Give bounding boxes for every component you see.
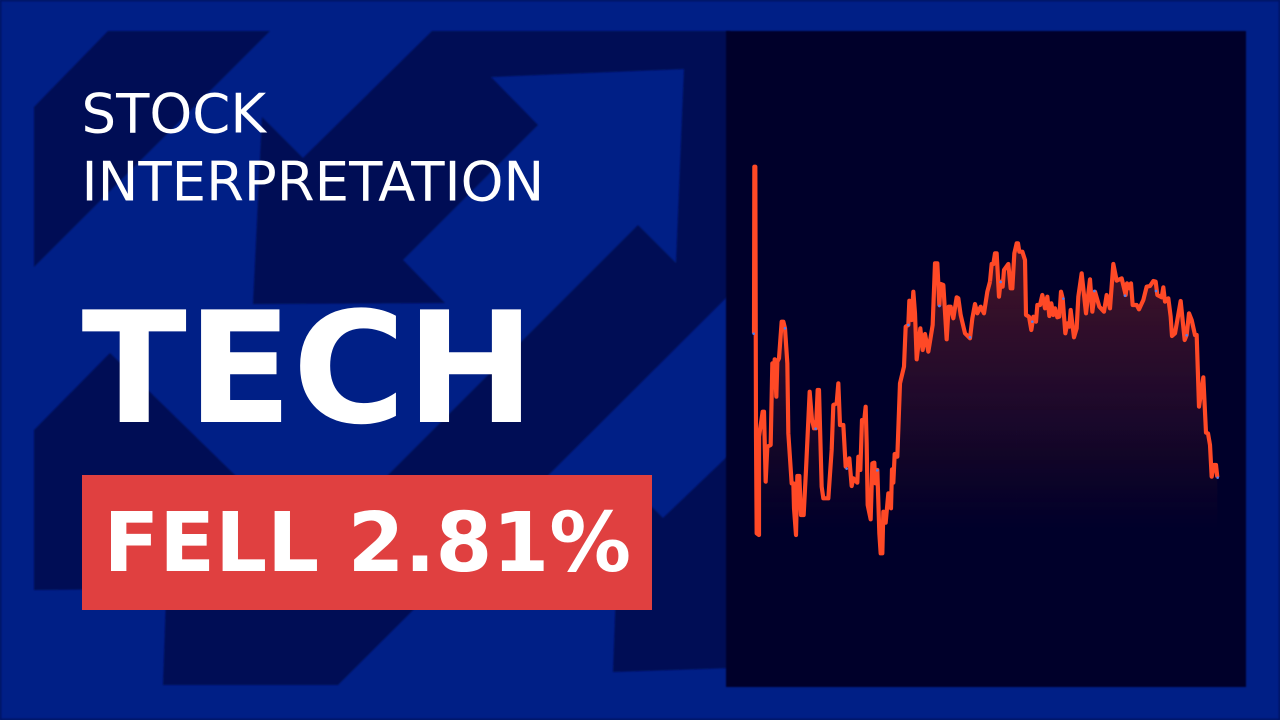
callout: percentage change — [82, 475, 652, 610]
title: stock interpretation: STOCK — [82, 82, 267, 146]
panel: chart — [726, 31, 1246, 687]
line chart: left part — [752, 167, 990, 553]
arrow: lower right — [613, 454, 730, 672]
chart background — [726, 31, 1246, 687]
background arrows — [34, 31, 730, 685]
callout background — [82, 475, 652, 610]
line chart: right part — [990, 243, 1219, 530]
callout text: FELL 2.81% — [104, 496, 631, 591]
arrow: lower left — [34, 353, 240, 590]
heading: sector name: TECH — [82, 280, 535, 459]
title: stock interpretation — [82, 82, 544, 214]
arrow: large centre — [163, 31, 730, 685]
title: stock interpretation: INTERPRETATION — [82, 150, 544, 214]
arrow: top left — [34, 31, 270, 267]
